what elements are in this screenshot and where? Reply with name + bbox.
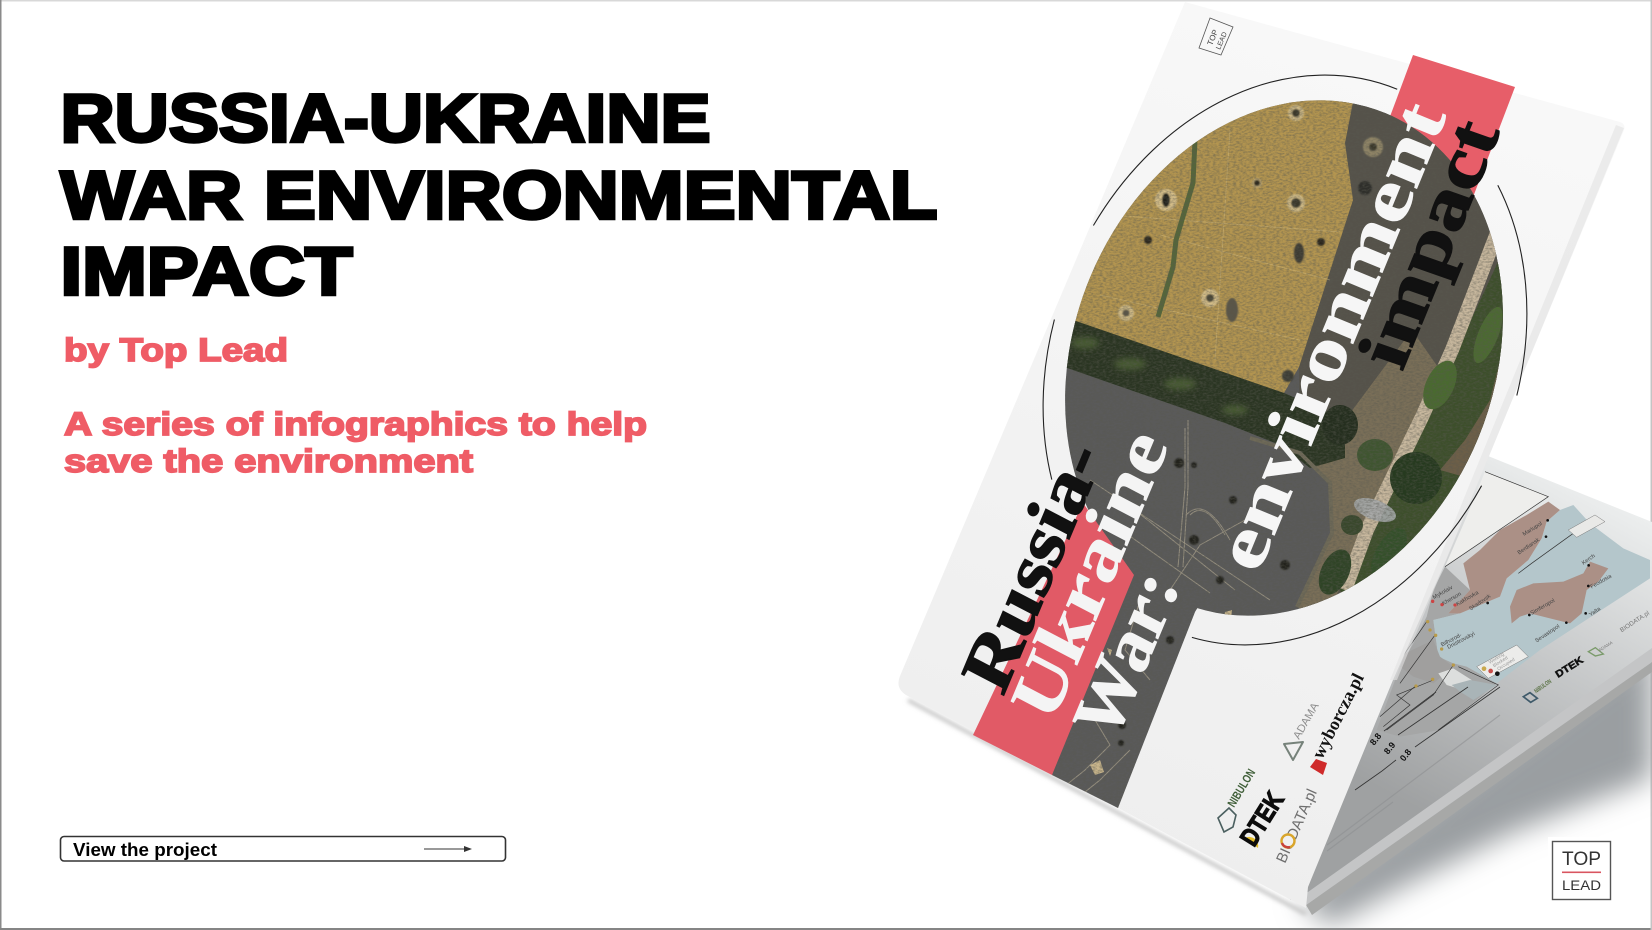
map city labels — [1432, 521, 1614, 651]
back page partner logos — [1523, 610, 1651, 702]
chart values: 8.9 — [1382, 740, 1397, 756]
map city labels: Skadovsk — [1468, 594, 1492, 612]
map city markers — [1414, 519, 1590, 688]
field boundary paths — [1100, 130, 1340, 360]
corner logo: top lead: TOP — [1562, 849, 1601, 870]
cover title: Ukraine — [995, 416, 1183, 732]
map city labels: Kerch — [1581, 553, 1597, 567]
golden field — [1074, 100, 1353, 393]
chart leader lines — [1355, 687, 1500, 790]
title — [60, 80, 938, 310]
roadside bushes — [1312, 303, 1509, 600]
subtitle — [64, 406, 647, 479]
back page partner logos: NIBULON — [1533, 678, 1553, 695]
back page partner logos: ADAMA — [1598, 640, 1614, 653]
cover title: environment — [1199, 91, 1462, 581]
cover ring — [1043, 75, 1527, 645]
map city labels: Yalta — [1588, 606, 1603, 618]
far edge soil — [1440, 363, 1500, 476]
page block edge — [1306, 647, 1652, 905]
map city labels: Mariupol — [1522, 521, 1543, 538]
map city labels: Dnistrovskyi — [1446, 631, 1476, 651]
map city labels: Sevastopol — [1534, 624, 1561, 644]
right of road vegetation — [1340, 262, 1503, 592]
back page partner logos: DTEK — [1554, 654, 1586, 681]
map connector lines — [1380, 472, 1573, 730]
corner logo: top lead: LEAD — [1562, 877, 1601, 893]
logo: nibulon — [1218, 766, 1258, 832]
subtitle: A series of infographics to help — [64, 406, 647, 442]
cover edge shadow — [908, 700, 1306, 914]
map legend box — [1477, 645, 1528, 678]
view the project button: View the project — [73, 840, 217, 860]
back cover edge — [1306, 662, 1652, 915]
cover lower red block — [973, 503, 1134, 775]
cover title — [946, 91, 1515, 751]
subtitle: save the environment — [64, 443, 473, 479]
map city labels: Mykolaiv — [1432, 585, 1454, 601]
cover title: Russia- — [946, 427, 1118, 704]
title: IMPACT — [60, 234, 352, 310]
map city labels: Berdiansk — [1517, 537, 1541, 556]
cover aerial photo — [1052, 100, 1503, 808]
curved field edge — [1250, 438, 1332, 607]
small top lead logo — [1199, 18, 1233, 55]
small top lead logo: TOP — [1206, 28, 1220, 47]
open map page — [1290, 456, 1652, 900]
chart values: 8.8 — [1368, 731, 1383, 747]
tree highlights — [1071, 337, 1248, 415]
map legend box: Occupied — [1496, 657, 1516, 672]
chart values: 0.8 — [1398, 747, 1413, 763]
dark field craters — [1118, 458, 1290, 746]
craters — [1118, 105, 1383, 382]
map legend box: Blocked — [1492, 655, 1509, 668]
logo: dtek: DTEK — [1234, 786, 1290, 851]
tree belt — [1066, 320, 1345, 468]
title: WAR ENVIRONMENTAL — [60, 158, 938, 234]
small top lead logo: LEAD — [1215, 31, 1229, 51]
tracks across dark field — [1060, 420, 1270, 800]
logo: biodata: BIODATA.pl — [1273, 787, 1321, 866]
map legend box: Working — [1488, 651, 1505, 665]
faint caption — [1327, 715, 1500, 851]
logo: adama: ADAMA — [1291, 700, 1322, 742]
rubble — [1354, 498, 1396, 522]
soil area — [1299, 102, 1503, 608]
road — [1345, 225, 1500, 590]
map city labels: Feodosia — [1590, 573, 1614, 590]
photo grain — [1052, 100, 1502, 808]
view the project button — [60, 836, 506, 861]
map city labels: Kherson — [1441, 591, 1463, 607]
book mockup — [898, 2, 1652, 926]
byline: by Top Lead — [64, 332, 288, 368]
lower soil — [1297, 330, 1440, 620]
title: RUSSIA-UKRAINE — [60, 80, 710, 156]
strip bright patches — [1090, 610, 1232, 775]
arrow — [424, 846, 472, 852]
map drawing — [1377, 472, 1651, 737]
map city labels: Bilhorod- — [1440, 632, 1463, 648]
cover title: impact — [1342, 110, 1515, 377]
map city labels: Simferopol — [1530, 598, 1556, 617]
logo: wyborcza: wyborcza.pl — [1308, 670, 1368, 762]
corner logo: top lead — [1548, 837, 1616, 901]
irrigation strip — [1158, 140, 1195, 317]
cover title: War: — [1057, 556, 1195, 751]
map tag box — [1568, 515, 1605, 537]
chart values — [1370, 733, 1411, 761]
front cover — [898, 2, 1624, 908]
map city labels: Kakhovka — [1455, 590, 1481, 608]
cast shadow — [1300, 640, 1652, 926]
back page partner logos: BIODATA.pl — [1619, 610, 1651, 634]
logo: adama — [1284, 700, 1322, 760]
cover top red block — [1370, 55, 1515, 205]
logo: nibulon: NIBULON — [1225, 766, 1258, 810]
